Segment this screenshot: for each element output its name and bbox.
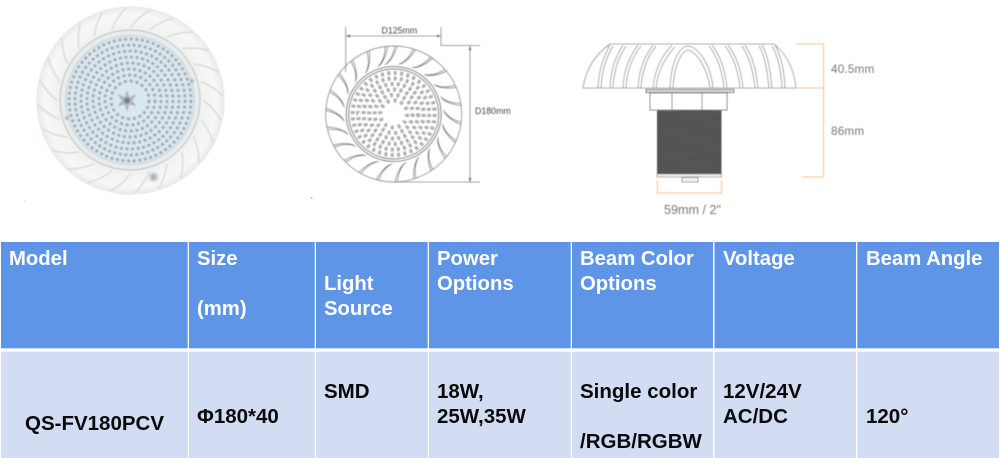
data row: /RGB/RGBW [580, 430, 702, 453]
data row: 120° [866, 405, 908, 428]
data row: Φ180*40 [197, 405, 279, 428]
header row: Source [324, 298, 393, 320]
header row: Beam Angle [866, 248, 982, 270]
header row: Options [437, 273, 514, 295]
orange height dimensions: 86mm [831, 125, 864, 138]
data row: 25W,35W [437, 405, 527, 428]
top view outline [325, 46, 462, 182]
clear lens and LED plate [60, 30, 200, 170]
data row: 12V/24V [723, 380, 802, 403]
technical drawing: side view with dimensions [583, 44, 874, 217]
header row: Beam Color [580, 248, 694, 270]
technical drawing: top view with dimensions [325, 26, 511, 182]
header row [1, 242, 999, 348]
data row: QS-FV180PCV [25, 412, 164, 435]
sensor button [148, 172, 158, 182]
stray specks [24, 198, 312, 202]
data row [1, 352, 999, 458]
flange and nut [646, 90, 734, 110]
data row: Single color [580, 380, 697, 403]
header row: Power [437, 248, 498, 270]
data row: SMD [324, 380, 370, 403]
dome with ribs [583, 44, 796, 88]
orange height dimensions [796, 44, 874, 177]
data row: AC/DC [723, 405, 788, 428]
D125mm dimension: D125mm [382, 26, 417, 36]
header row: Voltage [723, 248, 795, 270]
D125mm dimension [346, 26, 480, 72]
specification table [1, 242, 999, 458]
header row: Model [9, 248, 68, 270]
header row: Light [324, 273, 374, 295]
D180mm dimension [394, 46, 511, 182]
centre star of LEDs [118, 90, 136, 112]
header row: Options [580, 273, 657, 295]
product photo: round LED pool light [37, 7, 224, 194]
orange width dimension: 59mm / 2" [664, 203, 721, 217]
orange height dimensions: 40.5mm [831, 63, 874, 76]
threaded body [657, 110, 722, 182]
header row: (mm) [197, 298, 247, 320]
orange width dimension [658, 180, 722, 217]
header row: Size [197, 248, 238, 270]
white ribbed lamp housing [37, 7, 224, 194]
D180mm dimension: D180mm [475, 106, 511, 116]
data row: 18W, [437, 380, 484, 403]
